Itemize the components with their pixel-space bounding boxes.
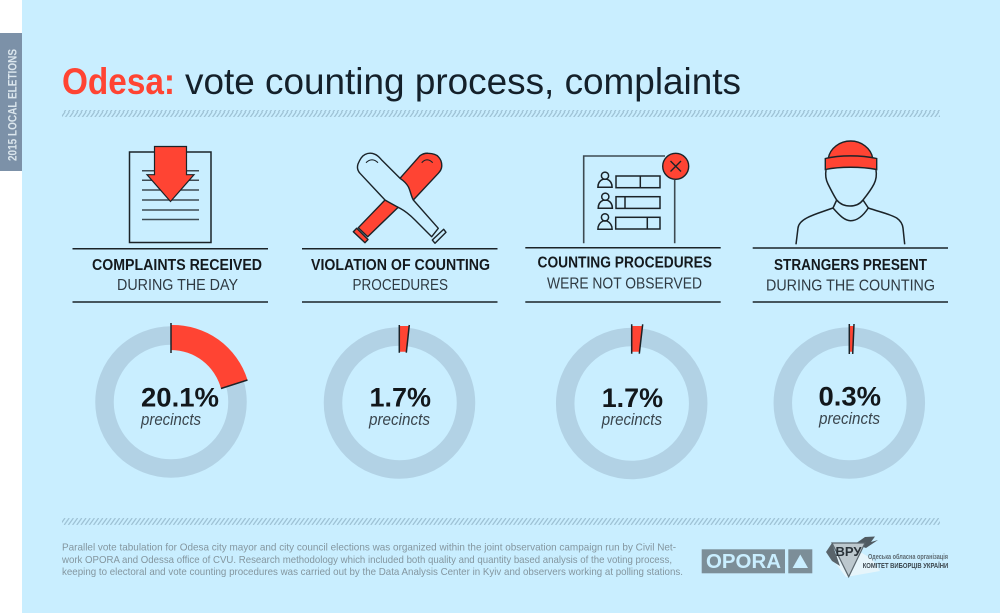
heading: counting procedures: WERE NOT OBSERVED — [547, 276, 702, 293]
icon: crossed bats — [353, 153, 446, 243]
donut chart: 20.1%: 20.1% — [141, 383, 219, 413]
heading: violation of counting — [302, 249, 498, 302]
heading: complaints received: COMPLAINTS RECEIVED — [92, 257, 262, 274]
donut chart: 1.7% — [333, 325, 466, 470]
logo: OPORA — [702, 549, 812, 573]
donut chart: 20.1%: precincts — [140, 411, 201, 429]
donut chart: 20.1% — [104, 323, 248, 468]
title: vote counting process, complaints — [185, 61, 741, 102]
logo: Committee of Voters of Ukraine: КОМІТЕТ ВИБОРЦІВ УКРАЇНИ — [863, 561, 948, 570]
donut chart: 0.3%: 0.3% — [818, 382, 881, 412]
footer methodology text — [61, 542, 683, 578]
icon: person in red hat — [796, 141, 905, 244]
heading: strangers present — [753, 248, 948, 302]
donut chart: 0.3%: precincts — [818, 410, 880, 428]
heading: violation of counting: PROCEDURES — [352, 277, 448, 294]
side tab: 2015 local elections: 2015 LOCAL ELETIONS — [6, 49, 20, 161]
donut chart: 1.7% — [565, 324, 698, 470]
donut chart: 0.3% — [783, 324, 916, 470]
heading: complaints received — [72, 249, 268, 302]
donut chart: 1.7%: precincts — [601, 411, 662, 429]
panel: complaints received — [72, 146, 268, 468]
footer methodology text: Parallel vote tabulation for Odesa city mayor and city council elections was organized within the joint observation campaign run by Civil Net- — [62, 542, 676, 554]
logo: Committee of Voters of Ukraine: Одеська обласна організація — [868, 552, 948, 561]
logo: Committee of Voters of Ukraine — [826, 536, 948, 577]
donut chart: 1.7%: 1.7% — [370, 383, 431, 413]
donut chart: 1.7%: 1.7% — [602, 383, 663, 413]
icon: protocol form with red cross — [584, 153, 689, 243]
footer methodology text: work OPORA and Odessa office of CVU. Research methodology which included both quality and quantity based analysis of the voting process, — [61, 554, 672, 566]
heading: complaints received: DURING THE DAY — [117, 277, 238, 294]
heading: counting procedures — [525, 248, 721, 302]
title: Odesa: — [62, 61, 175, 102]
panel: counting procedures not observed — [525, 153, 721, 470]
panel: strangers present — [753, 141, 948, 470]
panel: violation of counting procedures — [302, 153, 498, 470]
heading: strangers present: STRANGERS PRESENT — [774, 257, 927, 274]
heading: counting procedures: COUNTING PROCEDURES — [538, 255, 712, 272]
heading: violation of counting: VIOLATION OF COUNTING — [311, 257, 490, 274]
icon: document with arrow — [130, 146, 211, 242]
heading: strangers present: DURING THE COUNTING — [766, 278, 935, 295]
side tab: 2015 local elections — [0, 33, 22, 171]
footer methodology text: keeping to electoral and vote counting procedures was carried out by the Data Analysis Center in Kyiv and observers working at polling stations. — [62, 566, 683, 578]
logo: OPORA: OPORA — [706, 551, 781, 573]
logo: Committee of Voters of Ukraine: ВРУ — [836, 544, 862, 559]
donut chart: 1.7%: precincts — [368, 411, 430, 429]
